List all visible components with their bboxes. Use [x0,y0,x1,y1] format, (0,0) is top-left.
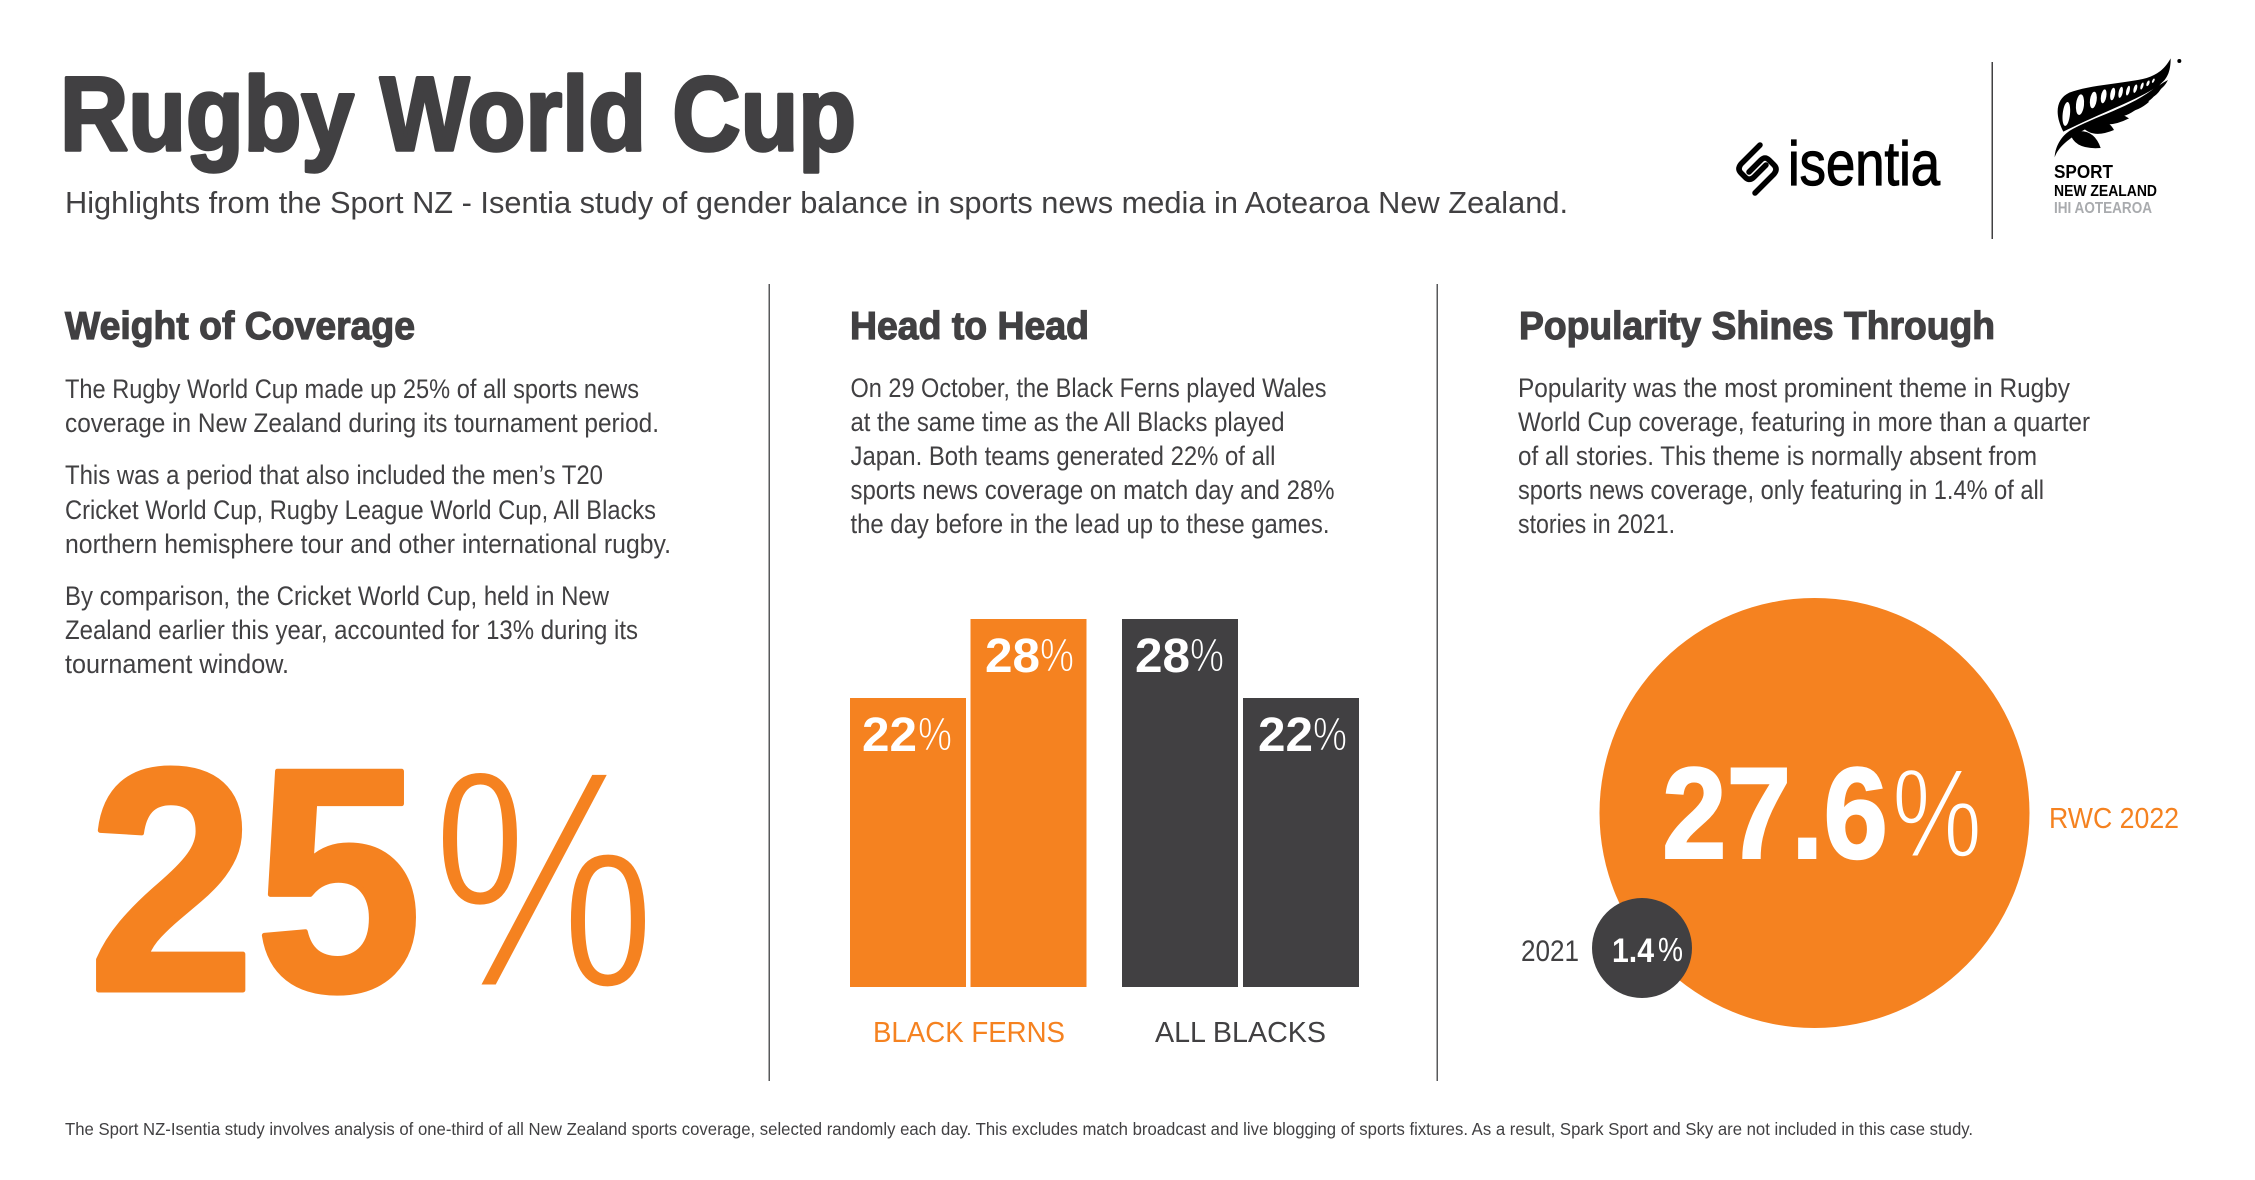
body text [1518,373,2090,539]
bubble: 2021: 1.4 [1612,932,1654,970]
label: Black Ferns: BLACK FERNS [873,1017,1065,1049]
panel: popularity shines through [1518,305,2179,1028]
logo: isentia: isentia [1788,130,1940,199]
bar: All Blacks 28%: % [1190,628,1224,681]
body text: World Cup coverage, featuring in more than a quarter [1518,407,2090,437]
body text: Zealand earlier this year, accounted for 13% during its [65,615,638,645]
body text [65,374,671,679]
bar: Black Ferns 28%: 28 [985,630,1040,683]
body text: sports news coverage, only featuring in 1.4% of all [1518,475,2044,505]
body text: stories in 2021. [1518,509,1675,539]
label: RWC 2022: RWC 2022 [2049,803,2179,835]
bubble: RWC 2022: 27.6 [1662,740,1888,886]
bar: Black Ferns 28% [970,619,1086,987]
big stat: 25%: 25 [88,703,422,1058]
bar: All Blacks 22%: 22 [1258,709,1313,762]
heading: Weight of Coverage [65,305,415,348]
body text: the day before in the lead up to these games. [850,509,1330,539]
panel: weight of coverage [65,305,671,1058]
body text: northern hemisphere tour and other international rugby. [65,529,671,559]
bar: All Blacks 22%: % [1313,707,1347,760]
column dividers [768,284,1438,1081]
bubble: 2021: % [1658,931,1683,968]
bar: Black Ferns 28%: % [1040,628,1074,681]
bar: Black Ferns 22% [850,698,966,987]
bar: Black Ferns 22%: % [918,707,952,760]
bubble: RWC 2022 [1600,598,2030,1028]
heading: Popularity Shines Through [1519,305,1995,348]
body text: of all stories. This theme is normally absent from [1518,441,2037,471]
label: All Blacks: ALL BLACKS [1155,1017,1326,1049]
icon: silver fern [2055,58,2181,157]
logo: Sport New Zealand: IHI AOTEAROA [2054,200,2152,217]
header divider [1992,62,1993,239]
logo: isentia [1739,130,1940,199]
bar: All Blacks 28% [1122,619,1238,987]
body text: The Rugby World Cup made up 25% of all sports news [65,374,639,404]
body text: This was a period that also included the men’s T20 [65,460,603,490]
subtitle: Highlights from the Sport NZ - Isentia study of gender balance in sports news media in Aotearoa New Zealand. [65,185,1568,220]
heading: Head to Head [850,305,1089,348]
body text: sports news coverage on match day and 28% [850,475,1334,505]
body text: Popularity was the most prominent theme in Rugby [1518,373,2071,403]
body text: at the same time as the All Blacks played [850,407,1284,437]
body text: On 29 October, the Black Ferns played Wales [850,373,1326,403]
logo: Sport New Zealand: SPORT [2054,161,2114,182]
body text: By comparison, the Cricket World Cup, held in New [65,581,610,611]
panel: head to head [850,305,1359,1049]
body text: tournament window. [65,649,289,679]
logo: Sport New Zealand: NEW ZEALAND [2054,183,2157,200]
label: 2021: 2021 [1521,935,1579,968]
body text: Japan. Both teams generated 22% of all [850,441,1276,471]
icon: isentia paperclip mark [1739,145,1776,193]
logo: Sport New Zealand [2054,58,2181,217]
bubble: 2021 [1592,898,1692,998]
body text: coverage in New Zealand during its tournament period. [65,408,659,438]
big stat: 25% [88,703,656,1058]
body text [850,373,1334,539]
bar chart [850,619,1359,1049]
bar: Black Ferns 22%: 22 [862,709,917,762]
big stat: 25%: % [432,706,656,1054]
bar: All Blacks 22% [1243,698,1359,987]
bubble: RWC 2022: % [1892,743,1982,884]
title: Rugby World Cup [60,56,856,173]
bar: All Blacks 28%: 28 [1135,630,1190,683]
body text: Cricket World Cup, Rugby League World Cup, All Blacks [65,495,656,525]
footnote: The Sport NZ-Isentia study involves analysis of one-third of all New Zealand sports coverage, selected randomly each day. This excludes match broadcast and live blogging of sports fixtures. As a result, Spark Sport and Sky are not included in this case study. [65,1119,1973,1139]
